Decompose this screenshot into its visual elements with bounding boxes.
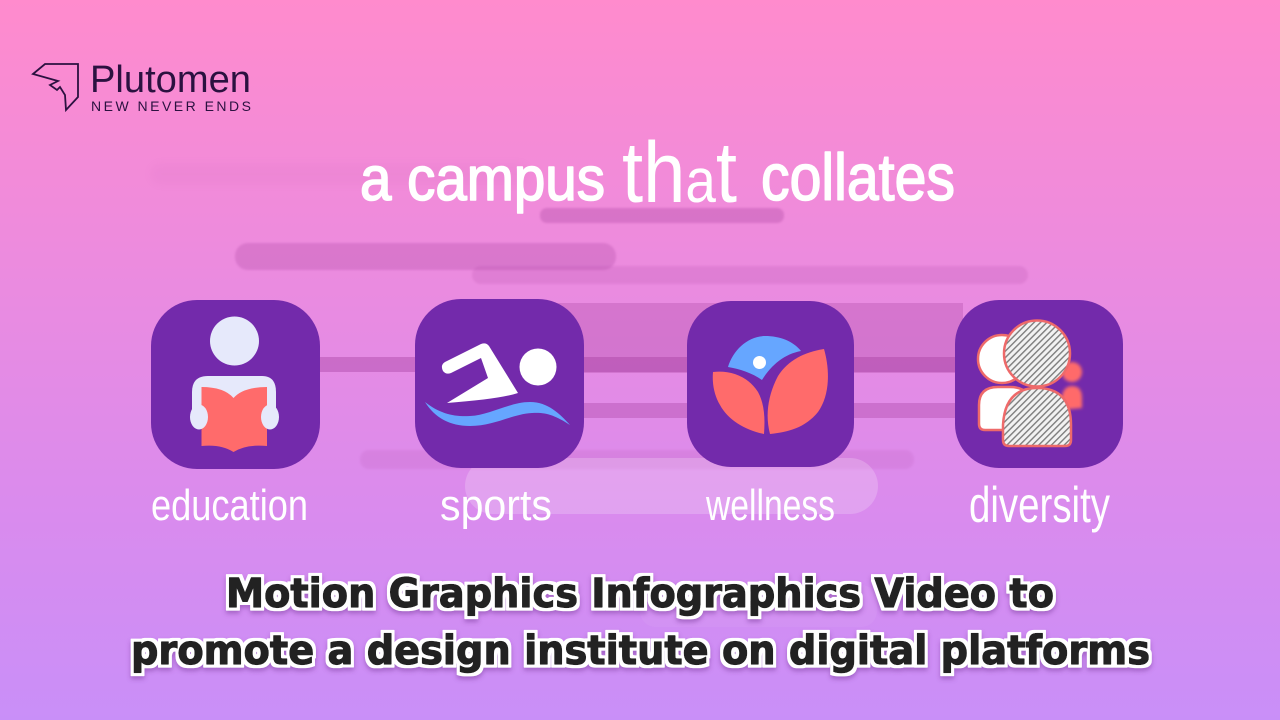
icon: reader with book: [190, 316, 279, 452]
sports tile: [415, 299, 584, 468]
logo: Plutomen: [33, 59, 251, 114]
label: diversity: diversity: [969, 477, 1110, 533]
icon: logo mark: [33, 64, 78, 110]
title: [360, 125, 955, 221]
label: education: education: [151, 481, 308, 530]
caption: Motion Graphics Infographics Video to: [226, 571, 1054, 617]
title: that: [622, 125, 737, 221]
logo tagline: NEW NEVER ENDS: [91, 98, 251, 114]
icon: swimmer: [425, 343, 570, 426]
icon: people group: [978, 320, 1082, 446]
panel: wellness: [687, 301, 854, 530]
label: wellness: wellness: [705, 481, 835, 530]
title: a campus: [360, 145, 605, 214]
panel: sports: [415, 299, 584, 530]
diversity tile: [955, 300, 1123, 468]
logo wordmark: Plutomen: [90, 59, 251, 101]
panel: diversity: [955, 300, 1123, 533]
background motion bars: [150, 163, 1028, 627]
caption: [131, 571, 1150, 674]
title: collates: [761, 140, 955, 214]
caption: promote a design institute on digital platforms: [131, 628, 1150, 674]
label: sports: sports: [440, 481, 552, 530]
icon: lotus: [713, 336, 828, 434]
education tile: [151, 300, 320, 469]
panel: education: [151, 300, 320, 530]
wellness tile: [687, 301, 854, 467]
